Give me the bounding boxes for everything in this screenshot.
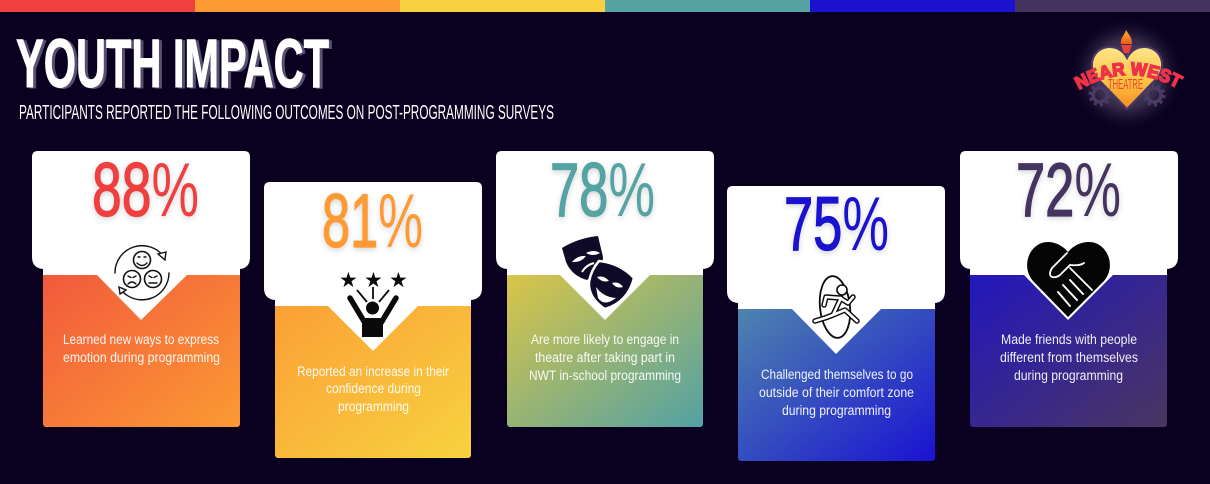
white header with notch (960, 151, 1178, 320)
statistic: 81% (322, 179, 423, 264)
description (529, 332, 681, 383)
description: Challenged themselves to go (761, 367, 913, 382)
card 5: 72% (960, 148, 1178, 427)
statistic: 88% (92, 148, 199, 233)
icon: person with stars: ★ (339, 268, 358, 292)
card 2: 81% (264, 179, 482, 458)
description: Are more likely to engage in (531, 332, 679, 347)
description: programming (338, 399, 409, 414)
panel: amber gradient (275, 301, 471, 458)
icon: runner through hoop (815, 275, 857, 339)
logo: Near West Theatre (1073, 26, 1184, 122)
card 4: 75% (727, 182, 945, 461)
description: emotion during programming (63, 350, 220, 365)
description: NWT in-school programming (529, 368, 681, 383)
top colour bar (0, 0, 1210, 12)
description: during programming (1014, 368, 1123, 383)
description (297, 364, 449, 414)
icon: person with stars (339, 268, 408, 337)
description: Reported an increase in their (297, 364, 449, 379)
panel: blue gradient (738, 304, 935, 461)
white header with notch (264, 182, 482, 351)
description: different from themselves (1000, 350, 1138, 365)
description (63, 332, 220, 365)
panel: yellow-teal gradient (507, 270, 703, 427)
white header with notch (32, 151, 250, 320)
logo: Near West Theatre: THEATRE (1108, 76, 1143, 93)
description: during programming (782, 403, 891, 418)
icon: person with stars: ★ (364, 268, 383, 292)
description: Learned new ways to express (63, 332, 219, 347)
description (1000, 332, 1138, 383)
card 3: 78% (496, 148, 714, 427)
logo: Near West Theatre: NEAR WEST (1073, 61, 1184, 90)
description: outside of their comfort zone (759, 385, 914, 400)
icon: emotions cycle (115, 246, 169, 300)
subtitle: PARTICIPANTS REPORTED THE FOLLOWING OUTCOMES ON POST-PROGRAMMING SURVEYS (19, 101, 554, 124)
statistic: 75% (784, 182, 889, 267)
white header with notch (496, 151, 714, 320)
card 1: 88% (32, 148, 250, 427)
description: theatre after taking part in (535, 350, 675, 365)
statistic: 72% (1016, 148, 1121, 233)
icon: theatre masks (562, 236, 634, 309)
panel: indigo-purple gradient (970, 270, 1167, 427)
icon: handshake heart (1027, 242, 1110, 317)
description: confidence during (326, 381, 421, 396)
icon: person with stars: ★ (389, 268, 408, 292)
description: Made friends with people (1001, 332, 1137, 347)
title: YOUTH IMPACT (16, 25, 329, 102)
description (759, 367, 914, 418)
panel: orange gradient (43, 270, 240, 427)
white header with notch (727, 186, 945, 354)
statistic: 78% (550, 148, 655, 233)
